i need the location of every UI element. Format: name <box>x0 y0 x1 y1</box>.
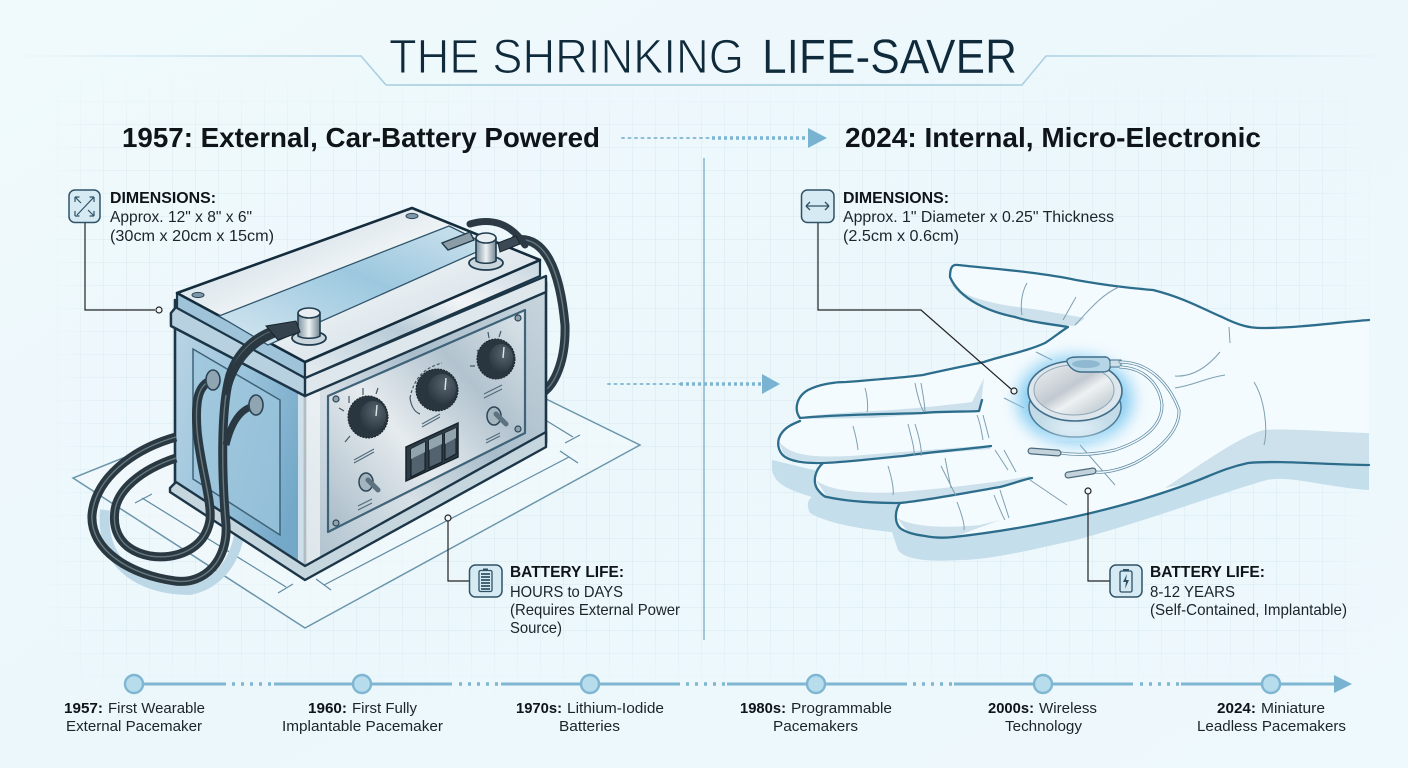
milestone 2024: Miniature <box>1261 700 1325 717</box>
callout: left battery life <box>445 515 681 637</box>
hand outline <box>778 265 1369 538</box>
callout: left dimensions: DIMENSIONS: <box>110 190 216 207</box>
timeline nodes <box>125 675 1280 693</box>
milestone 1980s <box>740 700 892 735</box>
heading: 2024: 2024: Internal, Micro-Electronic <box>845 122 1261 153</box>
milestone 1960: First Fully <box>352 700 417 717</box>
bottom rim <box>170 432 546 580</box>
left plate <box>193 349 280 535</box>
hand drop shadow <box>772 429 1369 561</box>
callout: right dimensions: Approx. 1" Diameter x 0.25" Thickness <box>843 209 1114 226</box>
timeline track <box>134 675 1352 693</box>
milestone 2024 <box>1197 700 1346 735</box>
illustration: hand with micro pacemaker <box>772 265 1369 561</box>
milestone 1970s: Lithium-Iodide <box>567 700 664 717</box>
cable shadow <box>105 510 240 590</box>
divider <box>703 158 705 640</box>
milestone 1970s: Batteries <box>559 718 620 735</box>
milestone 1960 <box>282 700 443 735</box>
milestone 1980s: Programmable <box>791 700 892 717</box>
front control panel <box>328 310 525 532</box>
milestone 2024: 2024: <box>1217 700 1256 717</box>
ground sheet <box>73 397 640 628</box>
callout: left battery life: (Requires External Power <box>510 602 681 619</box>
icon: width arrow <box>802 190 834 222</box>
title <box>10 30 1398 85</box>
arrow: middle <box>608 374 780 394</box>
milestone 2024: Leadless Pacemakers <box>1197 718 1346 735</box>
callout: right dimensions <box>802 190 1114 394</box>
callout: left battery life: BATTERY LIFE: <box>510 564 624 581</box>
milestone 2000s <box>988 700 1097 735</box>
milestone 2000s: Technology <box>1005 718 1083 735</box>
lid vents <box>406 213 418 219</box>
callout: right battery life <box>1085 488 1347 619</box>
hand fill <box>778 265 1369 537</box>
callout: right dimensions: (2.5cm x 0.6cm) <box>843 228 959 245</box>
milestone 1960: 1960: <box>308 700 347 717</box>
icon: battery <box>470 565 502 597</box>
milestone 1957: 1957: <box>64 700 103 717</box>
callout: right battery life: (Self-Contained, Implantable) <box>1150 602 1347 619</box>
terminal posts <box>292 232 520 345</box>
lid sides <box>177 293 305 378</box>
milestone 2000s: 2000s: <box>988 700 1034 717</box>
top rim <box>171 276 546 396</box>
callout: left dimensions: Approx. 12" x 8" x 6" <box>110 209 252 226</box>
battery left face <box>175 300 305 577</box>
milestone 2000s: Wireless <box>1039 700 1097 717</box>
cable ports and clamp <box>206 321 300 415</box>
rocker switch block <box>406 423 458 481</box>
corner highlight <box>298 392 320 577</box>
callout: left battery life: HOURS to DAYS <box>510 584 623 601</box>
callout: right dimensions: DIMENSIONS: <box>843 190 949 207</box>
heading: 1957: 1957: External, Car-Battery Powered <box>122 122 600 153</box>
milestone 1960: Implantable Pacemaker <box>282 718 443 735</box>
battery front face <box>305 282 546 577</box>
callout: left dimensions: (30cm x 20cm x 15cm) <box>110 228 274 245</box>
screws <box>333 315 521 526</box>
title: LIFE-SAVER <box>762 30 1017 84</box>
milestone 1957 <box>64 700 205 735</box>
milestone 1970s: 1970s: <box>516 700 562 717</box>
milestone 1980s: 1980s: <box>740 700 786 717</box>
milestone 1957: First Wearable <box>108 700 205 717</box>
cables front <box>92 326 292 581</box>
knobs <box>339 331 515 442</box>
lid top <box>177 208 540 362</box>
dimension lines <box>135 418 580 593</box>
icon: charged battery <box>1110 565 1142 597</box>
wrist shadow and finger shadows <box>778 282 1369 537</box>
callout: left dimensions <box>69 190 274 313</box>
icon: pacemaker device <box>1017 356 1133 444</box>
title: THE SHRINKING <box>389 30 744 84</box>
pacemaker leads <box>1031 362 1179 475</box>
milestone 1980s: Pacemakers <box>773 718 858 735</box>
callout: right battery life: 8-12 YEARS <box>1150 584 1235 601</box>
callout: right battery life: BATTERY LIFE: <box>1150 564 1265 581</box>
milestone 1957: External Pacemaker <box>66 718 202 735</box>
back cable <box>470 222 565 393</box>
timeline <box>64 675 1352 735</box>
illustration: car battery pacemaker <box>73 208 640 628</box>
milestone 1970s <box>516 700 664 735</box>
toggle switches <box>354 385 506 510</box>
icon: expand arrows <box>69 190 100 222</box>
palm crease lines <box>853 283 1266 530</box>
callout: left battery life: Source) <box>510 620 562 637</box>
lid blue strip <box>219 226 490 345</box>
arrow: header <box>622 128 827 148</box>
